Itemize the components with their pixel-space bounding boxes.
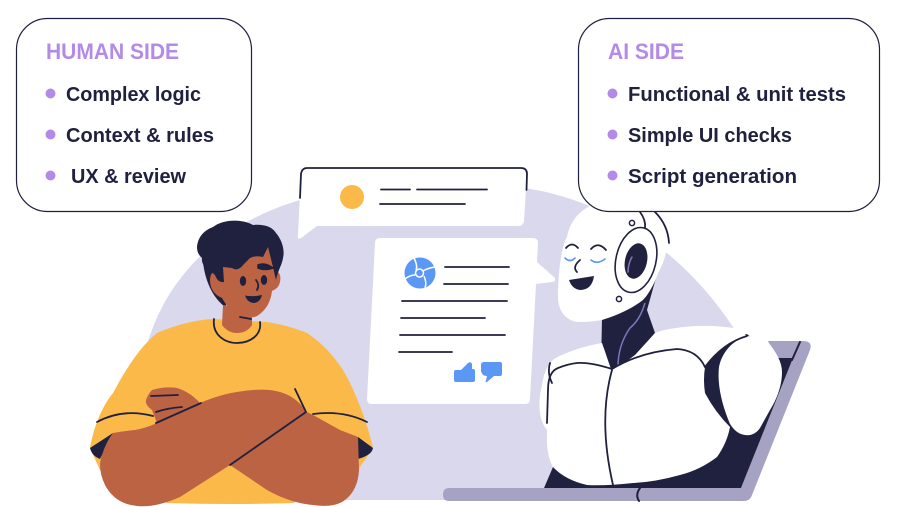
laptop xyxy=(443,334,811,501)
lavender background dome xyxy=(147,184,735,500)
speech bubble: top xyxy=(298,168,527,239)
face xyxy=(210,245,280,318)
neck xyxy=(222,305,252,333)
response lines xyxy=(399,267,509,352)
eyebrow xyxy=(258,264,273,270)
list item: simple UI checks: Simple UI checks xyxy=(628,124,792,147)
heading: AI SIDE xyxy=(608,39,684,64)
nose xyxy=(575,260,580,272)
sleeve hems xyxy=(97,413,367,422)
thumbs down icon xyxy=(481,362,502,382)
lower crossed arm xyxy=(230,412,359,506)
robot neck xyxy=(601,267,659,372)
eyes xyxy=(565,244,606,262)
yellow shirt xyxy=(90,319,373,504)
list item: context and rules: Context & rules xyxy=(66,124,214,147)
back hair xyxy=(203,262,238,307)
robot body xyxy=(539,326,782,485)
robot figure emerging from laptop xyxy=(443,205,811,501)
hand xyxy=(146,387,200,423)
nose xyxy=(256,280,258,290)
eyes xyxy=(240,275,267,286)
robot head xyxy=(558,205,669,322)
panel: AI side xyxy=(578,18,880,212)
thumbs up icon xyxy=(454,362,475,382)
list item: functional and unit tests: Functional & unit tests xyxy=(628,83,846,106)
human figure with crossed arms xyxy=(90,221,373,506)
list item: script generation: Script generation xyxy=(628,165,797,188)
sleeve lining xyxy=(90,433,373,459)
collar xyxy=(214,319,260,343)
heading: HUMAN SIDE xyxy=(46,39,179,64)
finger and arm lines xyxy=(151,389,306,465)
panel: human side xyxy=(16,18,252,212)
upper crossed arm xyxy=(100,390,307,506)
avatar dot xyxy=(340,185,364,209)
list item: complex logic: Complex logic xyxy=(66,83,201,106)
list item: UX and review: UX & review xyxy=(71,165,186,188)
AI logo icon xyxy=(404,258,436,288)
neck cables xyxy=(603,303,645,368)
hair xyxy=(197,221,284,282)
mouth xyxy=(569,276,594,290)
text lines xyxy=(380,190,487,204)
speech bubble: AI response xyxy=(367,238,555,404)
headphone ear xyxy=(609,223,663,297)
smile xyxy=(245,295,262,303)
